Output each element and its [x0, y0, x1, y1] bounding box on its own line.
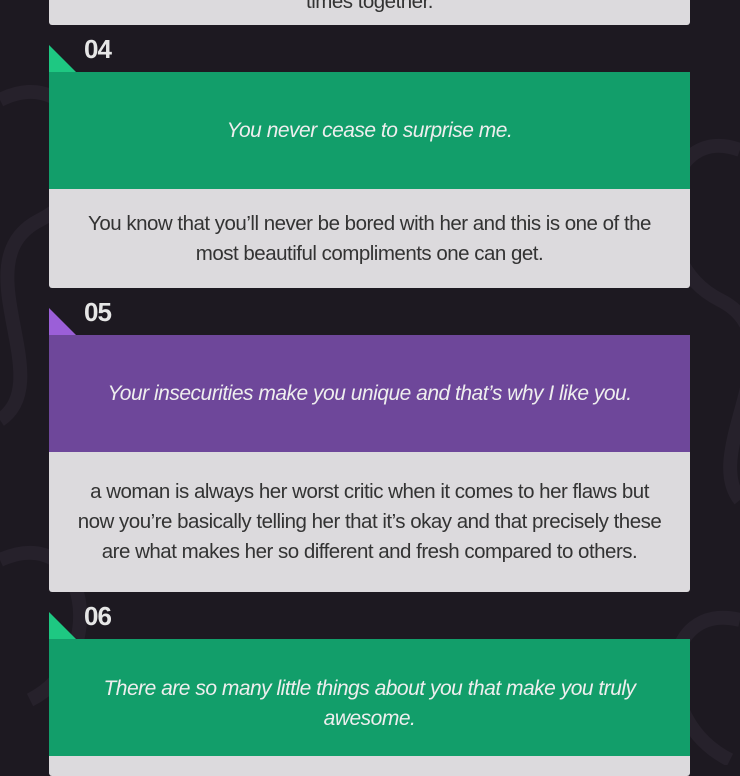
- number 05: 05: [84, 297, 111, 327]
- band 04: You never cease to surprise me.: [227, 118, 512, 142]
- triangle 05: [49, 308, 76, 335]
- number 04: 04: [84, 34, 111, 64]
- number 06: 06: [84, 601, 111, 631]
- band 04: [49, 72, 690, 189]
- card: 03 body: [49, 0, 690, 25]
- card 04: You know that you’ll never be bored with her and this is one of the most beautiful compliments one can get.: [88, 212, 651, 264]
- card 05: [49, 452, 690, 592]
- band 06: There are so many little things about you that make you truly awesome.: [103, 676, 636, 730]
- card 06: [49, 756, 690, 776]
- triangle 06: [49, 612, 76, 639]
- card 05: a woman is always her worst critic when it comes to her flaws but: [90, 480, 649, 503]
- band 06: [49, 639, 690, 756]
- band 05: Your insecurities make you unique and that’s why I like you.: [107, 382, 632, 404]
- band 05: [49, 335, 690, 452]
- card 04: [49, 189, 690, 288]
- triangle 04: [49, 45, 76, 72]
- card 05: now you’re basically telling her that it’s okay and that precisely these are what makes her so different and fresh compared to others.: [78, 510, 661, 563]
